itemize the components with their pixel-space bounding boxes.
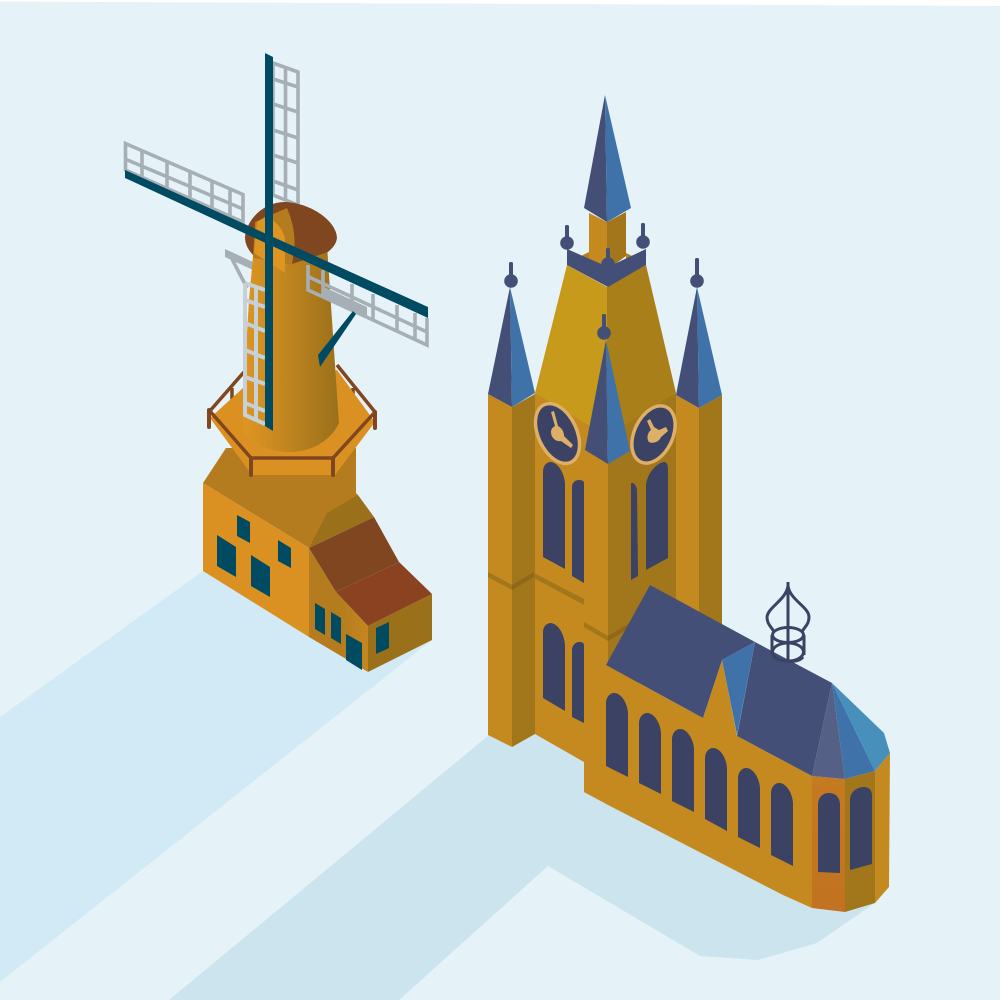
windmill platform railing [209, 410, 375, 475]
windmill extension: wall left [309, 548, 368, 672]
windmill hood light panel [254, 217, 285, 273]
windmill base: front wall [203, 483, 309, 637]
nave wall [584, 660, 812, 908]
apse roof facets [812, 683, 890, 779]
right tower spire [676, 258, 722, 408]
apse wall facets [812, 753, 890, 912]
church shadow [169, 700, 875, 1000]
tower ledges [488, 572, 630, 641]
windmill windows [217, 515, 389, 670]
windmill extension: brown roof [309, 517, 399, 592]
parapet [567, 249, 646, 287]
windmill front arm [322, 286, 367, 317]
central roof right [607, 265, 676, 440]
windmill tower [243, 245, 339, 452]
windmill hood [253, 208, 295, 265]
windmill [125, 53, 432, 672]
roof lantern [767, 582, 809, 661]
central tower neck [589, 212, 626, 270]
nave windows [606, 693, 793, 866]
central tower wall right [608, 393, 676, 700]
windmill extension: red roof [336, 562, 432, 626]
church [488, 95, 890, 912]
apse windows [818, 787, 872, 873]
nave roof right [737, 642, 832, 776]
windmill strut [318, 311, 356, 367]
right tower wall [676, 395, 722, 650]
windmill platform [210, 370, 375, 475]
windmill vertical sail spar [265, 53, 273, 431]
central tower wall left [535, 393, 608, 804]
right clock [621, 397, 686, 472]
windmill front sail grid: right [308, 265, 427, 345]
windmill rear sail grid: left [125, 144, 243, 222]
windmill rear arm [225, 249, 253, 288]
windmill platform back railing [209, 365, 375, 412]
windmill shadow [0, 571, 432, 982]
left clock [524, 394, 591, 473]
left tower spire [488, 262, 535, 407]
windmill base: main roof [203, 448, 358, 548]
windmill front sail grid: lower [245, 283, 265, 424]
windmill rear sail grid: top [273, 63, 298, 205]
windmill extension: wall right [368, 594, 432, 672]
parapet finials [560, 223, 650, 271]
transept blue roof [722, 642, 755, 735]
central roof left [535, 265, 607, 440]
white top strip [0, 0, 1000, 6]
central pinnacle [585, 314, 630, 464]
windmill extension: olive roof [309, 495, 374, 548]
windmill cap [245, 202, 337, 264]
roof stubs behind parapet [581, 252, 632, 262]
windmill horizontal sail spar [125, 170, 428, 318]
top spire [584, 95, 631, 222]
left tower wall [488, 394, 535, 747]
tower windows [543, 462, 668, 723]
nave roof left [606, 585, 755, 718]
